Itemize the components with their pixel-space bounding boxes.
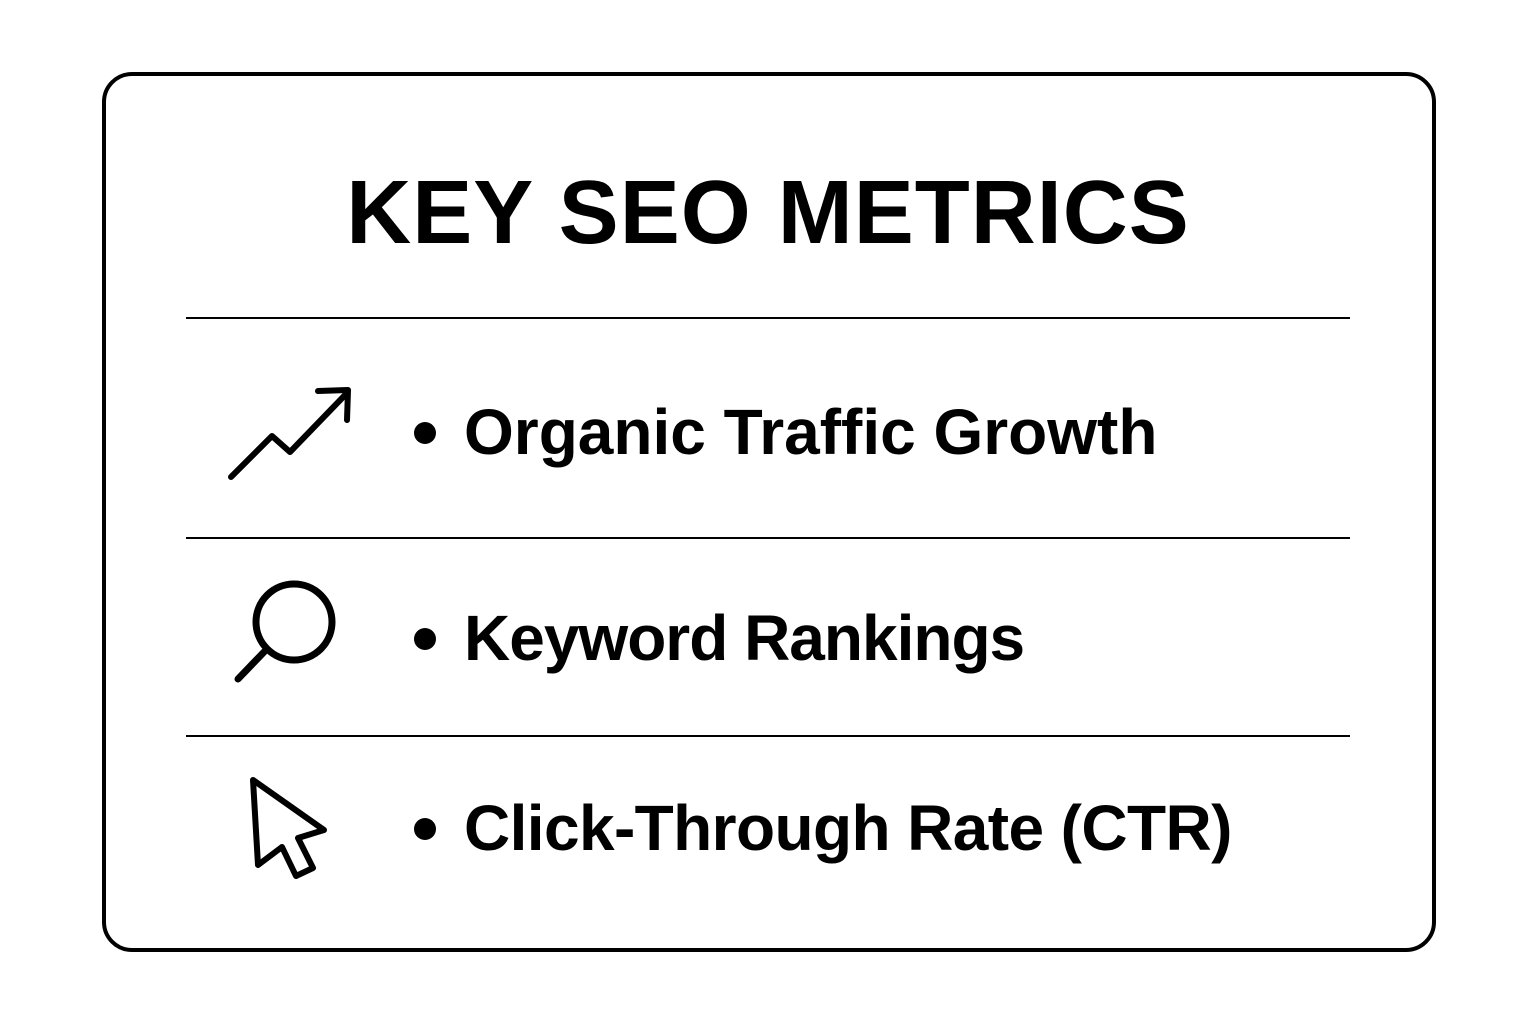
text: CTR: Click-Through Rate (CTR)	[464, 792, 1232, 864]
icon: trend arrow	[231, 390, 348, 477]
text: keyword rankings: Keyword Rankings	[464, 602, 1024, 674]
icon: cursor	[253, 780, 324, 876]
panel: card	[102, 72, 1436, 952]
title: KEY SEO METRICS	[346, 163, 1190, 263]
text: organic traffic growth: Organic Traffic Growth	[464, 396, 1157, 468]
icon: magnifier	[238, 584, 332, 679]
